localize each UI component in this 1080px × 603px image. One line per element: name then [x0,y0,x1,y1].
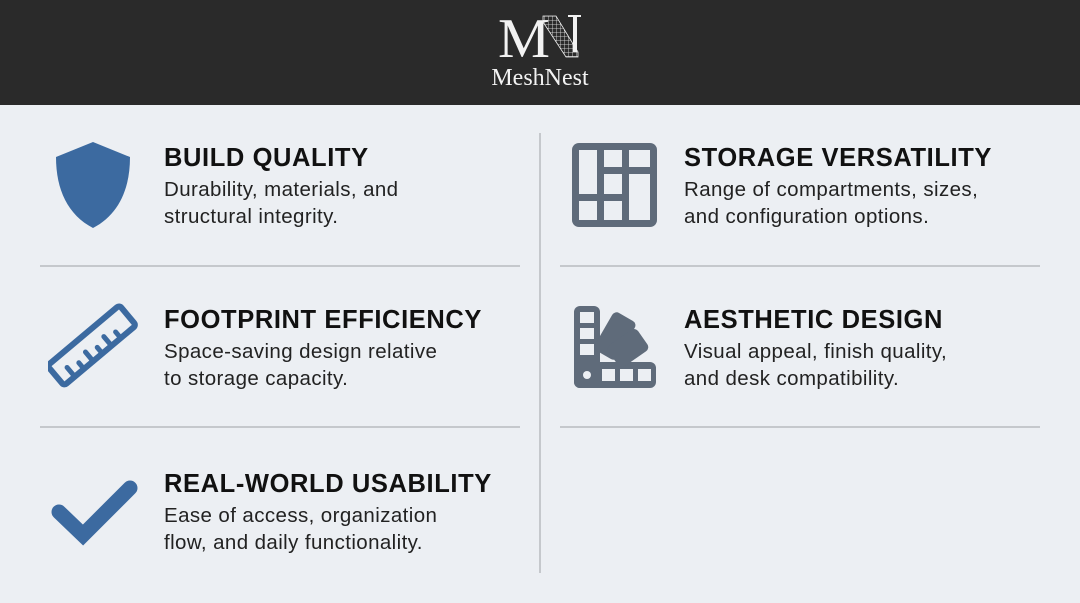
item: aesthetic design: AESTHETIC DESIGN [684,306,943,334]
header bar [0,0,1080,105]
item: footprint efficiency: to storage capacity. [164,367,348,390]
item: build quality: structural integrity. [164,205,338,228]
item: storage versatility: and configuration options. [684,205,929,228]
item: build quality: Durability, materials, and [164,178,398,201]
icon: checkmark [52,480,138,546]
item: storage versatility: Range of compartments, sizes, [684,178,978,201]
icon: shield [56,142,130,228]
item: aesthetic design [574,306,947,390]
item: real-world usability: REAL-WORLD USABILITY [164,470,492,498]
vertical divider [539,133,540,573]
item: real-world usability: Ease of access, organization [164,504,437,527]
item: real-world usability [52,470,492,554]
item: build quality: BUILD QUALITY [164,144,369,172]
item: footprint efficiency: Space-saving design relative [164,340,437,363]
icon: swatch fan [574,306,656,388]
item: aesthetic design: Visual appeal, finish quality, [684,340,947,363]
item: footprint efficiency: FOOTPRINT EFFICIENCY [164,306,482,334]
item: footprint efficiency [48,304,482,390]
icon: grid [572,143,657,227]
item: real-world usability: flow, and daily functionality. [164,531,423,554]
item: aesthetic design: and desk compatibility. [684,367,899,390]
logo [491,8,589,91]
item: build quality [56,142,398,228]
logo: M [498,8,550,70]
logo: MeshNest [491,65,589,91]
item: storage versatility: STORAGE VERSATILITY [684,144,992,172]
item: storage versatility [572,143,992,228]
icon: ruler [48,304,138,388]
